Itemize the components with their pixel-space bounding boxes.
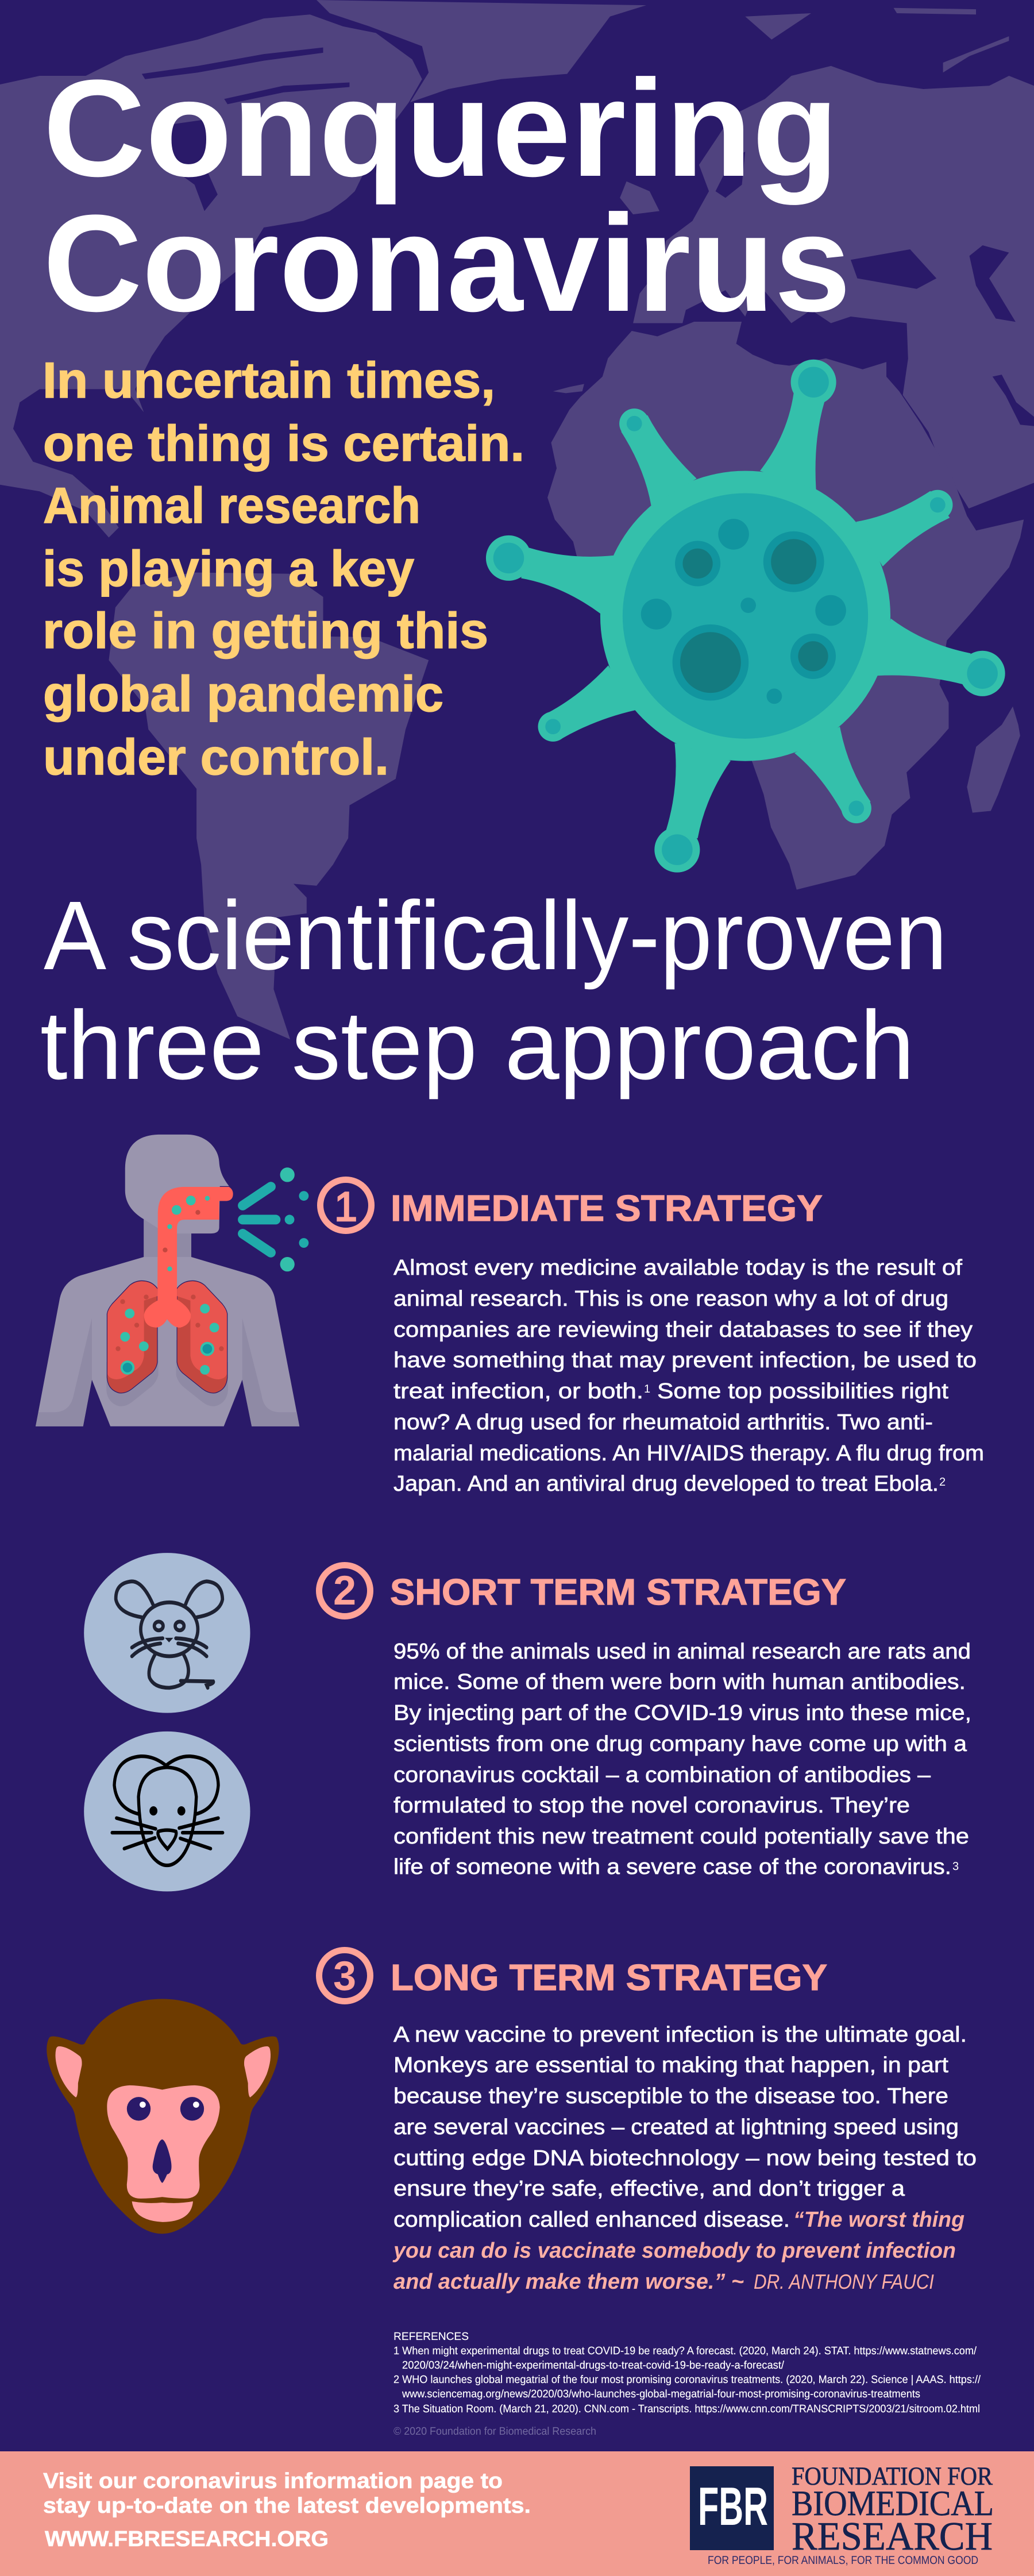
call to action	[43, 2469, 531, 2551]
body text: 95% of the animals used in animal research are rats and	[393, 1640, 971, 1664]
intro statement: role in getting this	[43, 602, 488, 659]
intro statement: Animal research	[43, 477, 420, 534]
body text: 2	[939, 1476, 946, 1488]
body text: mice. Some of them were born with human antibodies.	[393, 1670, 966, 1694]
body text: animal research. This is one reason why a lot of drug	[393, 1287, 948, 1311]
body text: Japan. And an antiviral drug developed to treat Ebola.	[393, 1472, 939, 1496]
body text: are several vaccines – created at lightning speed using	[393, 2115, 959, 2139]
illustration: rat in circle	[84, 1732, 250, 1891]
heading: three step approach: three step approach	[40, 991, 915, 1100]
body text: scientists from one drug company have come up with a	[393, 1732, 967, 1756]
left lung	[107, 1281, 157, 1393]
body text	[393, 1640, 971, 1879]
intro statement: under control.	[43, 728, 389, 785]
references	[393, 2331, 981, 2438]
logo: FBR: FBR	[698, 2476, 768, 2536]
heading: LONG TERM STRATEGY	[391, 1957, 827, 1998]
icon: coronavirus	[486, 360, 1005, 873]
panel: short term strategy	[319, 1565, 971, 1879]
references: 1 When might experimental drugs to treat COVID-19 be ready? A forecast. (2020, March 24). STAT. https://www.statnews.com/	[393, 2345, 977, 2357]
body text: complication called enhanced disease.	[393, 2208, 790, 2232]
number badge 3	[319, 1950, 370, 2002]
number badge 2	[319, 1565, 370, 1617]
airway	[144, 1187, 233, 1328]
copyright: © 2020 Foundation for Biomedical Research	[393, 2425, 596, 2438]
heading: SHORT TERM STRATEGY	[390, 1571, 846, 1613]
body text	[393, 1256, 984, 1496]
title	[43, 51, 851, 340]
title: Coronavirus	[43, 186, 851, 340]
logo: FBR: RESEARCH	[792, 2515, 993, 2559]
logo: FBR: FOUNDATION FOR	[792, 2462, 993, 2490]
body text: ensure they’re safe, effective, and don’t trigger a	[393, 2177, 905, 2201]
number badge 1	[321, 1180, 371, 1231]
body text: confident this new treatment could potentially save the	[393, 1825, 969, 1849]
body text: treat infection, or both.	[393, 1379, 643, 1403]
call to action: WWW.FBRESEARCH.ORG	[45, 2527, 329, 2551]
quote: you can do is vaccinate somebody to prevent infection	[392, 2239, 956, 2263]
body text: Monkeys are essential to making that happen, in part	[393, 2053, 948, 2077]
right lung	[177, 1281, 227, 1393]
references: 3 The Situation Room. (March 21, 2020). CNN.com - Transcripts. https://www.cnn.com/TRANSCRIPTS/2003/21/sitroom.02.html	[393, 2403, 980, 2415]
illustration: mouse in circle	[84, 1553, 250, 1713]
quote	[392, 2208, 964, 2294]
body text: 3	[952, 1860, 959, 1873]
title: Conquering	[43, 51, 839, 205]
body text: By injecting part of the COVID-19 virus into these mice,	[393, 1701, 971, 1725]
references: www.sciencemag.org/news/2020/03/who-launches-global-megatrial-four-most-promising-coronavirus-treatments	[402, 2388, 920, 2400]
heading: three step approach	[40, 881, 947, 1100]
body text: A new vaccine to prevent infection is the ultimate goal.	[393, 2023, 967, 2047]
call to action: Visit our coronavirus information page to	[43, 2469, 503, 2493]
intro statement: global pandemic	[43, 665, 443, 722]
body text: companies are reviewing their databases to see if they	[393, 1318, 973, 1342]
quote: “The worst thing	[793, 2208, 964, 2232]
intro statement: is playing a key	[43, 540, 414, 597]
quote: DR. ANTHONY FAUCI	[754, 2270, 934, 2293]
call to action: stay up-to-date on the latest developments.	[43, 2494, 531, 2518]
body text: formulated to stop the novel coronavirus. They’re	[393, 1794, 910, 1818]
intro statement: one thing is certain.	[43, 415, 524, 472]
body text: Some top possibilities right	[657, 1379, 948, 1403]
body text: now? A drug used for rheumatoid arthritis. Two anti-	[393, 1410, 933, 1434]
references: REFERENCES	[393, 2331, 469, 2343]
heading: three step approach: A scientifically-proven	[44, 881, 947, 990]
body text: Almost every medicine available today is the result of	[393, 1256, 962, 1280]
number badge 3: 3	[333, 1953, 356, 1999]
quote: and actually make them worse.” ~	[393, 2270, 744, 2294]
heading: IMMEDIATE STRATEGY	[391, 1187, 823, 1229]
logo: FBR: BIOMEDICAL	[792, 2484, 994, 2523]
footer band	[0, 2451, 1034, 2576]
world map background	[0, 0, 1034, 1039]
body text: malarial medications. An HIV/AIDS therapy. A flu drug from	[393, 1441, 984, 1466]
africa and madagascar	[547, 322, 1024, 890]
illustration: monkey face	[47, 1999, 279, 2234]
number badge 1: 1	[334, 1184, 357, 1230]
cough droplets	[243, 1167, 308, 1271]
references: 2020/03/24/when-might-experimental-drugs-to-treat-covid-19-be-ready-a-forecast/	[402, 2359, 785, 2371]
intro statement: In uncertain times,	[43, 352, 495, 408]
panel: long term strategy	[319, 1950, 977, 2294]
illustration: person with infected lungs	[36, 1135, 308, 1426]
body text	[393, 2023, 977, 2232]
body text: cutting edge DNA biotechnology – now being tested to	[393, 2146, 977, 2170]
references: 2 WHO launches global megatrial of the four most promising coronavirus treatments. (2020, March 22). Science | AAAS. https://	[393, 2374, 981, 2386]
body text: because they’re susceptible to the disease too. There	[393, 2084, 948, 2108]
body text: have something that may prevent infection, be used to	[393, 1348, 977, 1372]
number badge 2: 2	[333, 1568, 356, 1614]
logo: FBR: FOR PEOPLE, FOR ANIMALS, FOR THE COMMON GOOD	[708, 2554, 978, 2567]
body text: coronavirus cocktail – a combination of antibodies –	[393, 1763, 931, 1787]
body text: life of someone with a severe case of the coronavirus.	[393, 1855, 951, 1879]
body text: 1	[644, 1383, 650, 1395]
panel: immediate strategy	[321, 1180, 984, 1496]
intro statement	[43, 352, 524, 785]
logo: FBR	[690, 2462, 994, 2567]
